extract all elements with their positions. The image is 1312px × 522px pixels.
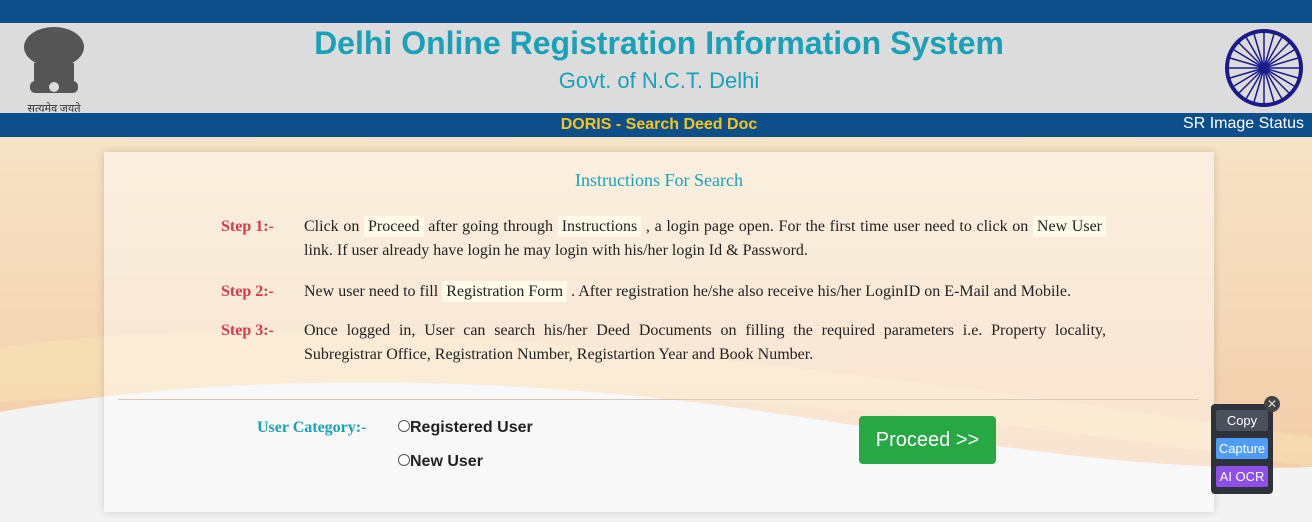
background waves bbox=[0, 137, 1312, 468]
header bbox=[0, 23, 1312, 113]
nav title: DORIS - Search Deed Doc bbox=[561, 116, 757, 133]
ocr widget: AI OCR bbox=[1220, 469, 1264, 484]
step 1: Step 1:- bbox=[221, 218, 274, 235]
ocr widget bbox=[1211, 404, 1273, 494]
text: Click on Proceed after going through Instructions , a login page open. For the first time user need to click on New User link. If user already have login he may login with his/her login Id & Password. bbox=[304, 218, 1102, 259]
icon: emblem: सत्यमेव जयते bbox=[28, 100, 80, 116]
step 3: Step 3:- bbox=[221, 322, 274, 339]
nav link: SR Image Status bbox=[1183, 115, 1304, 132]
step 2: Step 2:- bbox=[221, 283, 274, 300]
subtitle: Govt. of N.C.T. Delhi bbox=[559, 68, 759, 93]
title: Delhi Online Registration Information System bbox=[314, 25, 1004, 61]
text: New user need to fill Registration Form . After registration he/she also receive his/her LoginID on E-Mail and Mobile. bbox=[304, 283, 1071, 300]
ocr widget: ✕ bbox=[1267, 397, 1277, 411]
top bar bbox=[0, 0, 1312, 23]
panel: instructions bbox=[104, 152, 1214, 512]
proceed button bbox=[859, 416, 996, 464]
radio options: New User bbox=[410, 453, 483, 470]
heading: Instructions For Search bbox=[575, 170, 743, 190]
radio options bbox=[398, 419, 533, 470]
ocr widget: Capture bbox=[1219, 441, 1265, 456]
radio options: Registered User bbox=[410, 419, 533, 436]
proceed button: Proceed >> bbox=[876, 429, 979, 451]
nav bar bbox=[0, 113, 1312, 137]
icon: emblem bbox=[24, 27, 84, 116]
user category label: User Category:- bbox=[257, 419, 366, 436]
text: Once logged in, User can search his/her Deed Documents on filling the required parameters i.e. Property locality, Subregistrar Office, Registration Number, Registartion Year and Book Number. bbox=[304, 322, 1106, 363]
ocr widget: Copy bbox=[1227, 413, 1257, 428]
icon: chakra bbox=[1225, 29, 1303, 107]
